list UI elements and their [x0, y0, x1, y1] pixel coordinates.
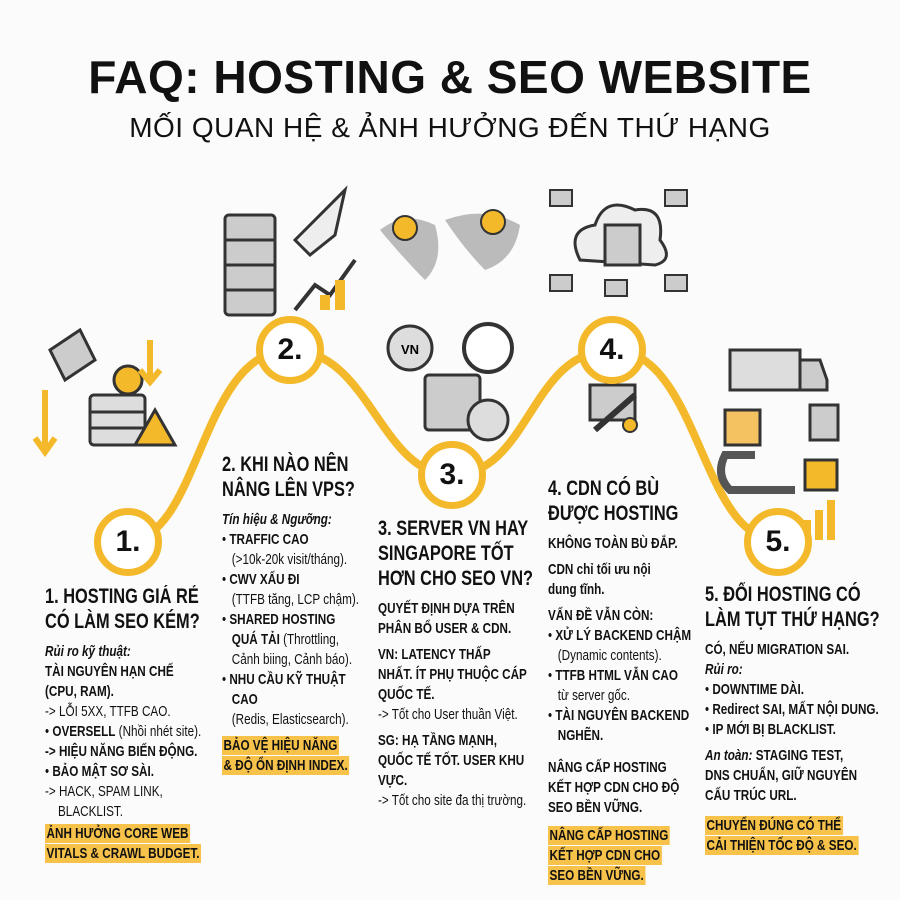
number 5 — [744, 508, 812, 576]
panel 3: QUYẾT ĐỊNH DỰA TRÊN — [378, 600, 515, 617]
icon: world map — [380, 209, 520, 280]
panel 4: • TÀI NGUYÊN BACKEND — [548, 707, 689, 724]
panel 3: NHẤT. ÍT PHỤ THUỘC CÁP — [378, 666, 527, 683]
panel 3: SINGAPORE TỐT — [378, 542, 514, 565]
panel 3: VỰC. — [378, 772, 407, 789]
panel 4: • XỬ LÝ BACKEND CHẬM — [548, 627, 691, 644]
icon: cheap hosting — [32, 328, 178, 457]
panel 2: • CWV XẤU ĐI — [222, 571, 300, 588]
panel 5: • Redirect SAI, MẤT NỘI DUNG. — [705, 701, 879, 718]
panel 5: Rủi ro: — [705, 661, 743, 678]
panel 4: NÂNG CẤP HOSTING — [550, 827, 668, 844]
panel 5: CẢI THIỆN TỐC ĐỘ & SEO. — [707, 837, 857, 854]
panel 1: -> LỖI 5XX, TTFB CAO. — [45, 703, 171, 720]
panel 2: • TRAFFIC CAO — [222, 531, 309, 548]
panel 4: • TTFB HTML VẪN CAO — [548, 667, 678, 684]
panel 1: -> HIỆU NĂNG BIẾN ĐỘNG. — [45, 743, 197, 760]
panel 5: LÀM TỤT THỨ HẠNG? — [705, 608, 880, 631]
icon: VN server clock: VN — [401, 342, 419, 357]
icon: VN server clock — [386, 322, 514, 442]
panel 2: • NHU CẦU KỸ THUẬT — [222, 671, 346, 688]
panel 4: CDN chỉ tối ưu nội — [548, 561, 651, 578]
panel 3: QUỐC TẾ. — [378, 686, 435, 703]
panel 4 — [548, 476, 691, 885]
panel 2: Cảnh biing, Cảnh báo). — [232, 651, 352, 668]
panel 1: • OVERSELL (Nhồi nhét site). — [45, 723, 201, 740]
panel 2: QUÁ TẢI (Throttling, — [232, 631, 339, 648]
panel 4: từ server gốc. — [558, 687, 630, 704]
panel 4: ĐƯỢC HOSTING — [548, 502, 678, 525]
icon: CDN cloud — [549, 189, 688, 297]
panel 3: -> Tốt cho User thuần Việt. — [378, 706, 518, 723]
panel 5: CHUYỂN ĐÚNG CÓ THỂ — [707, 817, 841, 834]
panel 2: BẢO VỆ HIỆU NĂNG — [224, 737, 337, 754]
number 3 — [418, 441, 486, 509]
panel 1: (CPU, RAM). — [45, 683, 114, 700]
panel 2: CAO — [232, 691, 258, 708]
panel 5: An toàn: STAGING TEST, — [705, 747, 843, 764]
number 4 — [578, 316, 646, 384]
panel 1: CÓ LÀM SEO KÉM? — [45, 610, 200, 633]
panel 5: DNS CHUẨN, GIỮ NGUYÊN — [705, 767, 857, 784]
panel 1: ẢNH HƯỞNG CORE WEB — [47, 825, 188, 842]
panel 3: -> Tốt cho site đa thị trường. — [378, 792, 526, 809]
title: FAQ: HOSTING & SEO WEBSITE — [88, 51, 812, 103]
panel 1: Rủi ro kỹ thuật: — [45, 643, 131, 660]
panel 1: • BẢO MẬT SƠ SÀI. — [45, 763, 154, 780]
panel 3 — [378, 517, 533, 809]
panel 2: (Redis, Elasticsearch). — [232, 711, 349, 728]
panel 2: NÂNG LÊN VPS? — [222, 478, 355, 501]
panel 5: 5. ĐỔI HOSTING CÓ — [705, 583, 861, 606]
panel 2: 2. KHI NÀO NÊN — [222, 453, 349, 476]
panel 4: KẾT HỢP CDN CHO — [550, 847, 660, 864]
panel 4: KHÔNG TOÀN BÙ ĐẮP. — [548, 535, 678, 552]
number 1: 1. — [115, 525, 141, 558]
panel 1 — [45, 585, 201, 863]
panel 1: 1. HOSTING GIÁ RẺ — [45, 585, 199, 608]
panel 4: 4. CDN CÓ BÙ — [548, 477, 659, 500]
panel 4: NÂNG CẤP HOSTING — [548, 759, 667, 776]
panel 3: HƠN CHO SEO VN? — [378, 567, 533, 590]
icon: VPS rocket — [224, 185, 357, 316]
panel 1: TÀI NGUYÊN HẠN CHẾ — [45, 663, 174, 680]
number 1 — [94, 508, 162, 576]
panel 3: SG: HẠ TẦNG MẠNH, — [378, 732, 497, 749]
panel 2: & ĐỘ ỔN ĐỊNH INDEX. — [224, 757, 348, 774]
panel 4: NGHẼN. — [558, 727, 603, 744]
panel 1: BLACKLIST. — [58, 803, 123, 820]
panel 3: PHÂN BỔ USER & CDN. — [378, 620, 511, 637]
icon: tools — [588, 384, 638, 433]
panel 1: -> HACK, SPAM LINK, — [45, 783, 163, 800]
panel 1: VITALS & CRAWL BUDGET. — [47, 845, 200, 862]
number 3: 3. — [439, 458, 465, 491]
panel 5: CÓ, NẾU MIGRATION SAI. — [705, 641, 849, 658]
number 5: 5. — [765, 525, 791, 558]
number 2 — [256, 316, 324, 384]
panel 4: (Dynamic contents). — [558, 647, 662, 664]
panel 2: • SHARED HOSTING — [222, 611, 335, 628]
panel 5: • IP MỚI BỊ BLACKLIST. — [705, 721, 836, 738]
panel 3: VN: LATENCY THẤP — [378, 646, 491, 663]
panel 2: Tín hiệu & Ngưỡng: — [222, 511, 332, 528]
panel 4: SEO BỀN VỮNG. — [550, 867, 644, 884]
panel 5 — [704, 582, 880, 855]
panel 4: SEO BỀN VỮNG. — [548, 799, 642, 816]
panel 2: (>10k-20k visit/tháng). — [232, 551, 347, 568]
panel 2: (TTFB tăng, LCP chậm). — [232, 591, 359, 608]
icon: migration truck — [716, 348, 840, 540]
panel 2 — [222, 452, 359, 775]
panel 3: 3. SERVER VN HAY — [378, 517, 528, 540]
panel 3: QUỐC TẾ TỐT. USER KHU — [378, 752, 524, 769]
subtitle: MỐI QUAN HỆ & ẢNH HƯỞNG ĐẾN THỨ HẠNG — [129, 112, 771, 143]
number 4: 4. — [599, 333, 625, 366]
panel 4: dung tĩnh. — [548, 581, 605, 598]
panel 5: CẤU TRÚC URL. — [705, 787, 797, 804]
panel 5: • DOWNTIME DÀI. — [705, 681, 804, 698]
panel 4: VẤN ĐỀ VẪN CÒN: — [548, 607, 653, 624]
panel 4: KẾT HỢP CDN CHO ĐỘ — [548, 779, 679, 796]
number 2: 2. — [277, 333, 303, 366]
